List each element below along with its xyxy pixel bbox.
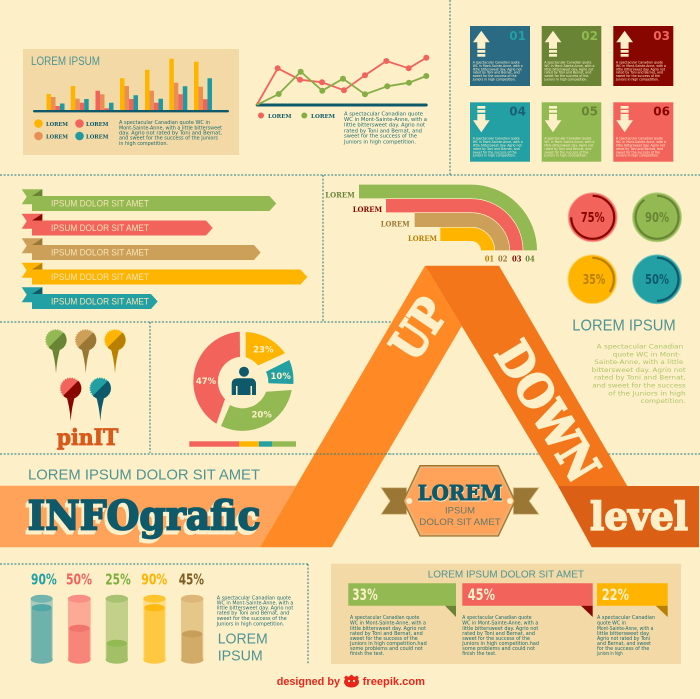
ribbon: teal xyxy=(22,287,158,309)
text block: bar chart description: in high competition. xyxy=(119,141,168,147)
text block: bar chart description: and sweet for the success of the Juniors xyxy=(119,136,218,142)
text block: bar chart description: A spectacular Canadian quote WC in xyxy=(119,120,210,126)
cylinder percent labels: 90% xyxy=(31,570,57,588)
text block: line chart description: WC in Mont-Sainte-Anne, with a xyxy=(344,117,427,123)
donut labels: 20% xyxy=(252,410,272,420)
arc labels: LOREM xyxy=(381,220,410,229)
arc labels: 01 xyxy=(485,253,494,263)
donut labels: 47% xyxy=(196,377,217,387)
ribbon: yellow xyxy=(22,263,307,284)
arc labels: LOREM xyxy=(353,205,382,214)
text block: line chart description: A spectacular Canadian quote xyxy=(344,112,423,118)
pin: green xyxy=(46,330,67,373)
square numbers: 05 xyxy=(581,104,598,118)
text block: column 2: finish the test. xyxy=(462,651,497,657)
square descriptions: A spectacular Canadian quote xyxy=(544,137,592,141)
square descriptions: WC in Mont-Sainte-Anne, with a xyxy=(473,64,523,68)
square descriptions xyxy=(472,60,666,158)
pin: teal xyxy=(90,378,111,421)
heading: lorem ipsum right: LOREM IPSUM xyxy=(572,318,676,335)
circle 75%: 75% xyxy=(581,210,605,226)
heading: bar chart title: LOREM IPSUM xyxy=(31,56,100,68)
square descriptions: A spectacular Canadian quote xyxy=(473,60,520,64)
text block: column 1: Juniors in high competition.had xyxy=(349,641,427,647)
text block: right description: bittersweet day. Agrio not xyxy=(592,367,686,374)
ribbon: red: IPSUM DOLOR SIT AMET xyxy=(51,223,149,233)
square descriptions: sweet for the success of the xyxy=(473,150,517,154)
box 22%: 22% xyxy=(602,585,629,604)
text block: cylinders description: little bittersweet day. Agrio not xyxy=(217,605,293,611)
text block: column 2: WC in Mont-Sainte-Anne, with a xyxy=(462,620,538,626)
text block: column 1: some problems and could not xyxy=(350,646,423,652)
bar chart bars xyxy=(46,59,212,110)
arc labels: 04 xyxy=(525,253,535,263)
donut labels xyxy=(196,346,291,420)
square descriptions: sweet for the success of the xyxy=(473,74,517,78)
pin: red xyxy=(61,378,81,421)
heading: pinIT: pinIT xyxy=(57,425,119,451)
text block: cylinders description: sweet for the success of the xyxy=(217,616,287,622)
donut labels: 10% xyxy=(271,372,291,382)
heading: lorem ipsum stacked: LOREM xyxy=(218,631,268,648)
pin: yellow xyxy=(105,330,126,373)
text block: right description: rated by Toni and Bernat, xyxy=(594,375,686,382)
text block: column 1: little bittersweet day. Agrio not xyxy=(350,626,426,632)
text block: column 3: Agrio not rated by Toni xyxy=(597,636,650,642)
arc labels: 02 xyxy=(498,253,508,263)
square numbers: 04 xyxy=(509,104,526,118)
cylinder tan 45% xyxy=(181,595,203,664)
badge: lorem: DOLOR SIT AMET xyxy=(419,517,501,528)
banner: INFOgrafic strip xyxy=(0,486,296,547)
label: UP: UP xyxy=(379,288,459,370)
arc labels xyxy=(325,190,535,263)
icon: freepik logo xyxy=(344,674,359,688)
footer: designed by freepik.com: freepik.com xyxy=(363,676,425,688)
square numbers: 02 xyxy=(581,29,598,43)
square descriptions: WC in Mont-Sainte-Anne, with a xyxy=(473,140,523,144)
arc labels: LOREM xyxy=(408,234,437,243)
ribbon: tan xyxy=(22,238,261,260)
square descriptions: A spectacular Canadian quote xyxy=(544,60,592,64)
label: level: level xyxy=(590,493,688,538)
badge: lorem: LOREM xyxy=(418,482,503,506)
text block: line chart description xyxy=(343,112,427,145)
panel: ribbon bars xyxy=(22,189,307,309)
panel: percentages xyxy=(331,564,681,664)
title: INFOgrafic: INFOgrafic xyxy=(26,494,259,542)
text block: right description xyxy=(592,344,686,405)
cylinder percent labels: 45% xyxy=(179,570,204,588)
line chart legend xyxy=(258,112,336,120)
square descriptions: WC in Mont-Sainte-Anne, with a xyxy=(616,140,666,144)
text block: column 2: A spectacular Canadian quote xyxy=(462,615,532,621)
text block: column 3: quote WC in xyxy=(597,620,626,626)
text block: column 2 xyxy=(461,615,539,657)
text block: column 1: sweet for the success of the xyxy=(350,636,418,642)
bar chart legend: LOREM xyxy=(86,134,108,140)
pin: tan xyxy=(76,330,96,373)
text block: column 1: A spectacular Canadian quote xyxy=(350,615,419,621)
square descriptions: WC in Mont-Sainte-Anne, with a xyxy=(616,64,666,68)
square numbers: 06 xyxy=(653,104,670,118)
cylinder percent labels: 50% xyxy=(66,570,92,588)
text block: line chart description: Juniors in high competition. xyxy=(343,139,416,145)
square descriptions: sweet for the success of the xyxy=(544,74,589,78)
circle 35%: 35% xyxy=(583,272,606,288)
cylinder percent labels xyxy=(31,570,204,588)
green series xyxy=(257,69,429,105)
ribbon: yellow: IPSUM DOLOR SIT AMET xyxy=(51,272,149,282)
square numbers: 03 xyxy=(653,29,670,43)
heading: lorem ipsum dolor sit amet: LOREM IPSUM DOLOR SIT AMET xyxy=(28,466,260,483)
bar chart legend: LOREM xyxy=(46,134,68,140)
square descriptions: WC in Mont-Sainte-Anne, with a xyxy=(544,64,594,68)
badge: lorem xyxy=(381,466,539,536)
text block: column 3: little bittersweet day. xyxy=(597,631,650,637)
text block: right description: of the Juniors in high xyxy=(608,390,686,397)
ribbon: tan: IPSUM DOLOR SIT AMET xyxy=(51,248,149,258)
square descriptions: Juniors in high competition. xyxy=(544,154,587,158)
square descriptions: rated by Toni and Bernat, and xyxy=(473,147,520,151)
band: down xyxy=(425,266,627,486)
text block: cylinders description: Juniors in high competition. xyxy=(216,621,285,627)
square descriptions: little bittersweet day. Agrio not xyxy=(544,67,594,71)
square descriptions: Juniors in high competition. xyxy=(615,154,659,158)
text block: column 3: for the success of the xyxy=(597,646,649,652)
text block: cylinders description: WC in Mont-Sainte-Anne, with a xyxy=(217,600,293,606)
text block: column 2: little bittersweet day. Agrio not xyxy=(462,626,538,632)
chart: quarter arc bands xyxy=(325,184,537,263)
text block: cylinders description: rated by Toni and Bernat, and xyxy=(217,611,289,617)
ribbon: green: IPSUM DOLOR SIT AMET xyxy=(51,199,149,209)
panel: percent circles xyxy=(568,193,681,304)
footer: designed by freepik.com: designed by xyxy=(277,676,341,688)
square descriptions: little bittersweet day. Agrio not xyxy=(473,67,522,71)
text block: column 3: A spectacular Canadian xyxy=(597,615,655,621)
text block: bar chart description: Mont-Sainte-Anne, with a little bittersweet xyxy=(119,125,222,131)
donut chart xyxy=(193,332,293,431)
text block: right description: competition. xyxy=(641,398,686,405)
footer: designed by freepik.com xyxy=(277,674,425,688)
band: up xyxy=(260,266,462,547)
arc labels: 03 xyxy=(512,253,522,263)
square descriptions: sweet for the success of the xyxy=(616,150,661,154)
title: INFOgrafic: INFOgrafic xyxy=(28,492,261,539)
square descriptions: A spectacular Canadian quote xyxy=(473,137,520,141)
square descriptions: rated by Toni and Bernat, and xyxy=(616,71,663,75)
text block: right description: A spectacular Canadian xyxy=(597,344,684,351)
square descriptions: sweet for the success of the xyxy=(544,150,589,154)
cylinder green 25% xyxy=(106,595,128,664)
square descriptions: rated by Toni and Bernat, and xyxy=(544,147,591,151)
square descriptions: rated by Toni and Bernat, and xyxy=(544,71,591,75)
text block: right description: quote WC in Mont- xyxy=(613,351,681,358)
text block: column 2: sweet for the success of the xyxy=(462,636,530,642)
square descriptions: sweet for the success of the xyxy=(616,74,661,78)
arc labels: LOREM xyxy=(325,190,355,199)
pins xyxy=(46,330,126,421)
line chart xyxy=(256,55,429,145)
bar chart legend: LOREM xyxy=(86,122,108,128)
square numbers xyxy=(509,29,670,118)
square descriptions: WC in Mont-Sainte-Anne, with a xyxy=(544,140,594,144)
text block: column 3 xyxy=(596,615,655,657)
icon: person xyxy=(232,367,256,395)
title: INFOgrafic: INFOgrafic xyxy=(25,497,258,544)
square descriptions: little bittersweet day. Agrio not xyxy=(616,144,666,148)
badge: lorem: LOREM xyxy=(418,481,502,505)
box 45%: 45% xyxy=(468,585,495,604)
line chart legend: LOREM xyxy=(268,114,292,120)
panel: numbered squares xyxy=(470,26,673,162)
cylinder yellow 90% xyxy=(143,595,166,664)
cylinders chart xyxy=(31,570,204,664)
text block: column 3: and Bernat, and sweet xyxy=(597,641,651,647)
stacked bar xyxy=(189,441,296,447)
text block: column 3: Juniors in high xyxy=(596,651,623,657)
heading: lorem ipsum stacked: IPSUM xyxy=(218,648,263,665)
square numbers: 01 xyxy=(509,29,526,43)
panel: bar chart xyxy=(23,49,239,155)
text block: right description: Sainte-Anne, with a little xyxy=(594,359,684,366)
text block: line chart description: rated by Toni and Bernat, and xyxy=(344,128,422,134)
square descriptions: little bittersweet day. Agrio not xyxy=(616,67,666,71)
square descriptions: Juniors in high competition. xyxy=(472,154,516,158)
heading: lorem ipsum stacked xyxy=(218,631,268,665)
donut labels: 23% xyxy=(253,346,274,356)
circle 90%: 90% xyxy=(645,210,669,226)
red series xyxy=(257,55,429,105)
cylinder percent labels: 90% xyxy=(141,570,167,588)
text block: bar chart description: day. Agrio not rated by Toni and Bernat, xyxy=(119,130,222,136)
cylinder percent labels: 25% xyxy=(105,570,131,588)
text block: cylinders description: A spectacular Canadian quote xyxy=(217,595,291,601)
bar chart legend: LOREM xyxy=(46,122,68,128)
square descriptions: little bittersweet day. Agrio not xyxy=(544,144,594,148)
text block: column 2: Juniors in high competition.had xyxy=(461,641,539,647)
box 45% xyxy=(462,583,593,617)
text block: column 1 xyxy=(349,615,427,657)
circle 50%: 50% xyxy=(645,272,669,288)
text block: column 3: Mont-Sainte-Anne, with a xyxy=(597,626,653,632)
square descriptions: A spectacular Canadian quote xyxy=(616,60,664,64)
square descriptions: rated by Toni and Bernat, and xyxy=(473,71,520,75)
box 33%: 33% xyxy=(352,585,378,604)
cylinder teal 90% xyxy=(31,595,53,664)
cylinder red 50% xyxy=(68,595,91,664)
text block: line chart description: little bittersweet day. Agrio not xyxy=(344,123,425,129)
badge: lorem: IPSUM xyxy=(445,505,475,516)
text block: column 1: WC in Mont-Sainte-Anne, with a xyxy=(350,620,426,626)
text block: column 2: some problems and could not xyxy=(462,646,535,652)
square descriptions: A spectacular Canadian quote xyxy=(616,137,664,141)
label: DOWN: DOWN xyxy=(484,331,611,491)
text block: right description: and sweet for the success xyxy=(592,383,686,390)
ribbon: teal: IPSUM DOLOR SIT AMET xyxy=(51,297,149,307)
box 22% xyxy=(597,583,668,617)
text block: cylinders description xyxy=(216,595,293,627)
square descriptions: Juniors in high competition. xyxy=(472,78,516,82)
square descriptions: rated by Toni and Bernat, and xyxy=(616,147,663,151)
text block: column 2: rated by Toni and Bernat, and xyxy=(462,631,535,637)
line chart legend: LOREM xyxy=(311,114,336,120)
ribbon: green xyxy=(22,189,276,211)
square descriptions: Juniors in high competition. xyxy=(615,78,659,82)
text block: column 1: rated by Toni and Bernat, and xyxy=(350,631,423,637)
text block: column 1: finish the test. xyxy=(350,651,385,657)
icon: arrows up and down xyxy=(473,31,633,132)
box 33% xyxy=(348,583,456,617)
bar chart legend xyxy=(34,119,109,140)
square descriptions: Juniors in high competition. xyxy=(544,78,587,82)
text block: bar chart description xyxy=(119,120,222,147)
text block: line chart description: sweet for the success of the xyxy=(344,134,417,140)
panel heading: LOREM IPSUM DOLOR SIT AMET xyxy=(428,569,585,581)
square descriptions: little bittersweet day. Agrio not xyxy=(473,144,522,148)
banner: level xyxy=(558,486,699,547)
ribbon: red xyxy=(22,214,213,236)
